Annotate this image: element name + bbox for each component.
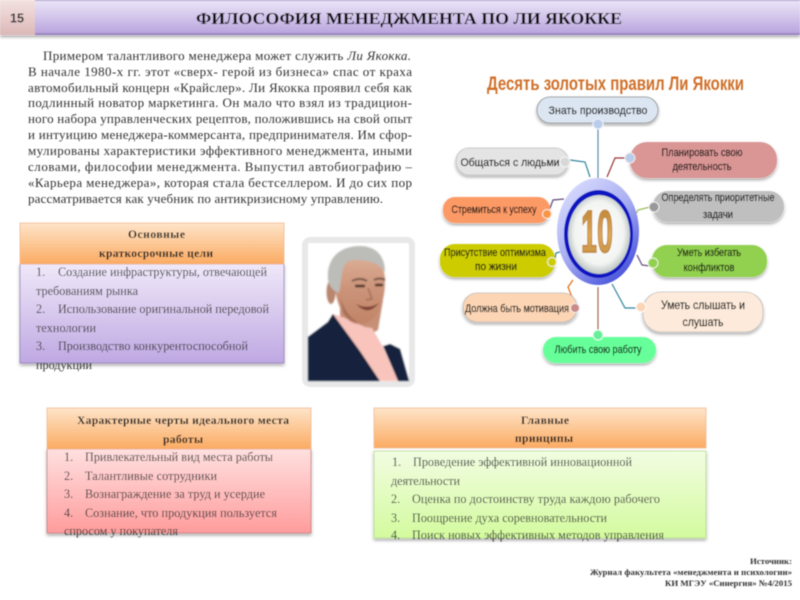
rule: communicate: Общаться с людьми: [460, 157, 560, 169]
rule: hear and listen: слушать: [682, 315, 724, 329]
intro paragraph: Примером талантливого менеджера может служить Ли Якокка.: [43, 48, 411, 63]
heading: Характерные черты идеального места: [77, 414, 289, 427]
smile: [356, 303, 379, 310]
rule: communicate: [456, 148, 570, 175]
workplace list: 1.: [64, 450, 73, 464]
goals list: 1.: [36, 265, 45, 279]
title: ФИЛОСОФИЯ МЕНЕДЖМЕНТА ПО ЛИ ЯКОККЕ: [196, 9, 622, 28]
rule: optimism: [440, 244, 556, 277]
portrait photo: [305, 240, 412, 384]
rule: avoid conflicts: [648, 245, 767, 277]
rule: plan: деятельность: [672, 161, 732, 173]
workplace list: 2.: [64, 469, 73, 483]
principles list: Поиск новых эффективных методов управления: [412, 528, 664, 542]
intro paragraph: автомобильный концерн «Крайслер». Ли Якокка проявил себя как: [28, 80, 413, 95]
rule: motivation: Должна быть мотивация: [465, 303, 569, 315]
source note: Журнал факультета «менеджмента и психологии»: [590, 567, 792, 577]
diagram: ten golden rules: [440, 74, 784, 363]
rule: priorities: Определять приоритетные: [662, 192, 774, 204]
rule: strive for success: [443, 197, 552, 223]
principles list: Оценка по достоинству труда каждою рабочего: [412, 492, 660, 506]
source note: [590, 556, 793, 588]
principles list: 1.: [392, 455, 401, 469]
intro paragraph: словами, философии менеджмента. Выпустил автобиографию –: [28, 159, 412, 174]
goals list: [36, 265, 269, 372]
cheek shadow: [340, 296, 358, 322]
workplace list: Талантливые сотрудники: [85, 469, 217, 483]
goals list: требованиям рынка: [36, 284, 139, 298]
workplace list: Сознание, что продукция пользуется: [85, 506, 277, 520]
slide number: 15: [10, 12, 24, 26]
heading: принципы: [515, 432, 573, 445]
heading: Основные: [128, 228, 185, 241]
goals list: технологии: [36, 321, 96, 335]
principles list: [391, 455, 664, 542]
rule: avoid conflicts: конфликтов: [684, 262, 735, 274]
principles list: Проведение эффективной инновационной: [413, 455, 632, 469]
principles list: деятельности: [391, 474, 460, 488]
workplace list: 4.: [64, 506, 73, 520]
intro paragraph: [28, 48, 413, 206]
workplace list: Привлекательный вид места работы: [85, 450, 273, 464]
intro paragraph: рассматривается как учебник по антикризисному управлению.: [28, 191, 383, 206]
panel: ideal workplace: [47, 408, 311, 538]
rule: hear and listen: Уметь слышать и: [661, 298, 745, 312]
rule: motivation: [463, 293, 580, 322]
connector lines: [550, 123, 650, 332]
panel: short-term goals: [20, 223, 284, 372]
goals list: 2.: [36, 302, 45, 316]
central circle with 10: 10: [581, 199, 613, 265]
goals list: Использование оригинальной передовой: [58, 302, 269, 316]
central circle with 10: [557, 178, 639, 285]
header bar: [0, 0, 800, 35]
nose shadow: [366, 288, 372, 300]
rule: love your work: Любить свою работу: [554, 344, 642, 356]
source note: Источник:: [750, 556, 792, 566]
goals list: продукции: [36, 358, 92, 372]
principles list: 3.: [391, 511, 400, 525]
rule: plan: Планировать свою: [662, 147, 742, 159]
slide number: [0, 0, 35, 35]
workplace list: [64, 450, 277, 538]
goals list: Производство конкурентоспособной: [58, 339, 248, 353]
rule: hear and listen: [636, 292, 763, 332]
rule: plan: [625, 142, 777, 178]
rule: priorities: [649, 191, 784, 222]
rule: know production: [537, 97, 658, 129]
heading: Главные: [521, 414, 569, 427]
goals list: Создание инфраструктуры, отвечающей: [58, 265, 267, 279]
rule: know production: Знать производство: [548, 105, 648, 117]
heading: [515, 414, 573, 445]
rule: optimism: по жизни: [475, 261, 517, 273]
intro paragraph: и интуицию менеджера-коммерсанта, предпринимателя. Им сфор-: [28, 127, 412, 142]
panel: main principles: [374, 408, 706, 542]
rule: love your work: [543, 330, 656, 363]
heading: [77, 414, 289, 446]
workplace list: 3.: [64, 487, 73, 501]
rule: optimism: Присутствие оптимизма: [444, 247, 547, 259]
principles list: Поощрение духа соревновательности: [412, 511, 607, 525]
intro paragraph: В начале 1980-х гг. этот «сверх- герой из бизнеса» спас от краха: [28, 64, 412, 79]
source note: КИ МГЭУ «Синергия» №4/2015: [665, 578, 793, 588]
jacket left: [308, 314, 380, 381]
heading: краткосрочные цели: [99, 247, 213, 260]
shirt: [333, 314, 398, 381]
principles list: 2.: [391, 492, 400, 506]
workplace list: Вознаграждение за труд и усердие: [85, 487, 265, 501]
hair: [328, 246, 385, 293]
intro paragraph: «Карьера менеджера», которая стала бестселлером. И до сих пор: [28, 175, 412, 190]
goals list: 3.: [36, 339, 45, 353]
rule: strive for success: Стремиться к успеху: [452, 204, 537, 216]
neck: [340, 300, 383, 340]
heading: работы: [163, 433, 203, 446]
intro paragraph: мулированы характеристики эффективного менеджмента, иными: [28, 143, 412, 158]
brows and eyes: [352, 278, 385, 281]
rule: avoid conflicts: Уметь избегать: [677, 247, 741, 259]
ear: [326, 280, 336, 304]
face: [334, 256, 385, 324]
intro paragraph: ного набора управленческих рецептов, положившись на свой опыт: [28, 111, 412, 126]
principles list: 4.: [391, 528, 400, 542]
jacket right: [383, 344, 409, 381]
heading: [99, 228, 213, 260]
collar: [380, 337, 392, 346]
workplace list: спросом у покупателя: [64, 524, 178, 538]
intro paragraph: подлинный новатор маркетинга. Он мало что взял из традицион-: [28, 95, 412, 110]
rule: priorities: задачи: [703, 209, 733, 221]
